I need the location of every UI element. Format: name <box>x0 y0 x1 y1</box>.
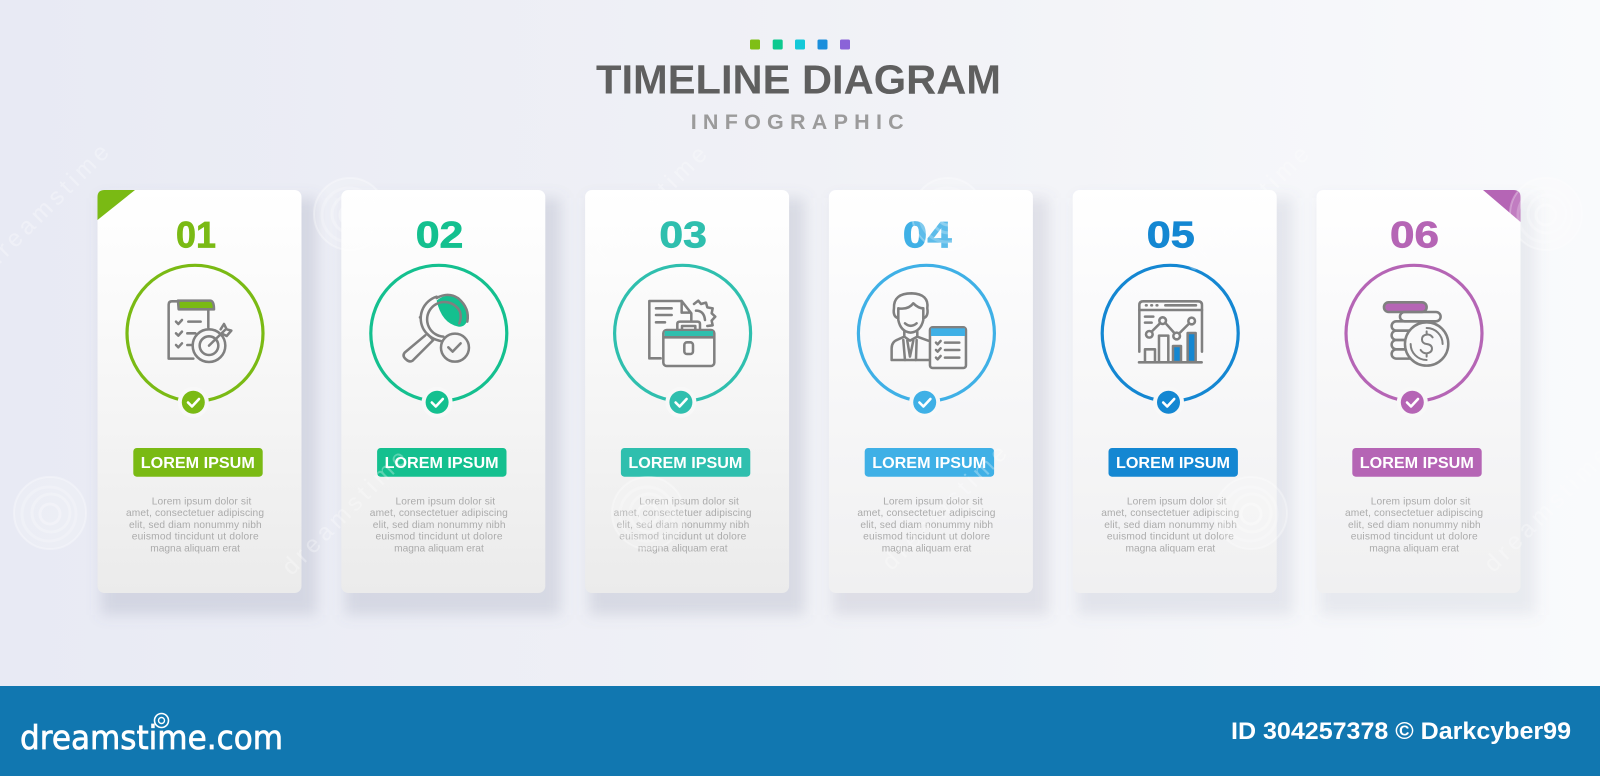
check badge <box>1397 387 1428 418</box>
panel: step 05 <box>1073 190 1277 593</box>
description: elit, sed diam nonummy nibh <box>1104 520 1237 531</box>
description: amet, consectetuer adipiscing <box>1345 508 1483 519</box>
number: 05 <box>1147 215 1195 256</box>
ring <box>1346 265 1482 401</box>
description: magna aliquam erat <box>1369 543 1459 554</box>
description: amet, consectetuer adipiscing <box>1101 508 1240 519</box>
description: euismod tincidunt ut dolore <box>132 532 259 543</box>
icon: coins <box>1384 302 1448 366</box>
footer banner <box>0 686 1600 776</box>
decorative color dots <box>750 40 850 50</box>
label: LOREM IPSUM <box>385 455 499 472</box>
panel: step 01 <box>98 190 302 593</box>
icon: businessman and checklist <box>892 293 966 368</box>
label <box>1352 448 1482 477</box>
description: amet, consectetuer adipiscing <box>614 508 752 519</box>
description: magna aliquam erat <box>394 543 484 554</box>
description: euismod tincidunt ut dolore <box>863 532 990 543</box>
icon: analytics window <box>1139 301 1202 362</box>
description: Lorem ipsum dolor sit <box>396 496 495 508</box>
ring <box>371 265 507 401</box>
label <box>621 448 750 477</box>
ring <box>615 265 751 401</box>
description: euismod tincidunt ut dolore <box>1107 532 1234 543</box>
description: euismod tincidunt ut dolore <box>619 532 747 543</box>
panel: step 06 <box>1316 190 1520 593</box>
icon: magnifier and leaf <box>404 295 469 362</box>
label: LOREM IPSUM <box>1360 455 1474 472</box>
ring <box>1102 265 1238 401</box>
label: LOREM IPSUM <box>628 455 742 472</box>
corner ribbon <box>1483 190 1520 222</box>
check badge <box>665 387 696 418</box>
check badge <box>178 387 209 418</box>
description: euismod tincidunt ut dolore <box>376 532 503 543</box>
icon: checklist and target <box>169 301 231 362</box>
label <box>133 448 263 477</box>
description: elit, sed diam nonummy nibh <box>617 520 749 531</box>
description: elit, sed diam nonummy nibh <box>1348 520 1481 531</box>
description <box>1101 496 1240 554</box>
description: magna aliquam erat <box>638 543 728 554</box>
description <box>370 496 508 554</box>
description <box>1345 496 1483 554</box>
description: elit, sed diam nonummy nibh <box>373 520 506 531</box>
number: 04 <box>903 215 952 256</box>
description: Lorem ipsum dolor sit <box>883 496 983 508</box>
label: LOREM IPSUM <box>872 455 986 472</box>
description: Lorem ipsum dolor sit <box>639 496 739 508</box>
description: magna aliquam erat <box>882 543 972 554</box>
watermark overlay: dreamstime <box>877 440 1013 576</box>
description: amet, consectetuer adipiscing <box>857 508 996 519</box>
description: Lorem ipsum dolor sit <box>152 496 251 508</box>
label <box>1108 448 1238 477</box>
number: 02 <box>416 215 463 256</box>
label: LOREM IPSUM <box>1116 455 1230 472</box>
label <box>377 448 506 477</box>
watermark overlay: dreamstime <box>577 141 713 277</box>
label: LOREM IPSUM <box>141 455 255 472</box>
label <box>865 448 994 477</box>
ring <box>127 265 263 401</box>
ring <box>858 265 994 401</box>
image credit: ID 304257378 © Darkcyber99 <box>1231 718 1571 745</box>
panel: step 02 <box>341 190 545 593</box>
description: elit, sed diam nonummy nibh <box>129 520 262 531</box>
watermark overlay: dreamstime <box>277 445 413 581</box>
panel: step 03 <box>585 190 789 593</box>
description: amet, consectetuer adipiscing <box>126 508 264 519</box>
description: elit, sed diam nonummy nibh <box>860 520 993 531</box>
icon: document, gear and briefcase <box>649 301 715 366</box>
check badge <box>1153 387 1184 418</box>
watermark overlay <box>0 139 1600 581</box>
title: TIMELINE DIAGRAM <box>596 56 1001 102</box>
subtitle: INFOGRAPHIC <box>691 110 904 134</box>
description: magna aliquam erat <box>1126 543 1215 554</box>
site logo: dreamstime.com <box>20 718 283 757</box>
card shadows <box>101 198 1536 615</box>
description <box>614 496 752 554</box>
description: Lorem ipsum dolor sit <box>1371 496 1470 508</box>
check badge <box>909 387 940 418</box>
description: Lorem ipsum dolor sit <box>1127 496 1227 508</box>
description: euismod tincidunt ut dolore <box>1351 532 1478 543</box>
number: 03 <box>659 215 707 256</box>
description: magna aliquam erat <box>150 543 240 554</box>
number: 01 <box>176 215 216 256</box>
description <box>857 496 996 554</box>
check badge <box>422 387 453 418</box>
number: 06 <box>1390 215 1439 256</box>
corner ribbon <box>98 190 135 220</box>
description: amet, consectetuer adipiscing <box>370 508 508 519</box>
description <box>126 496 264 554</box>
watermark overlay: dreamstime <box>1179 141 1315 277</box>
panel: step 04 <box>829 190 1033 593</box>
